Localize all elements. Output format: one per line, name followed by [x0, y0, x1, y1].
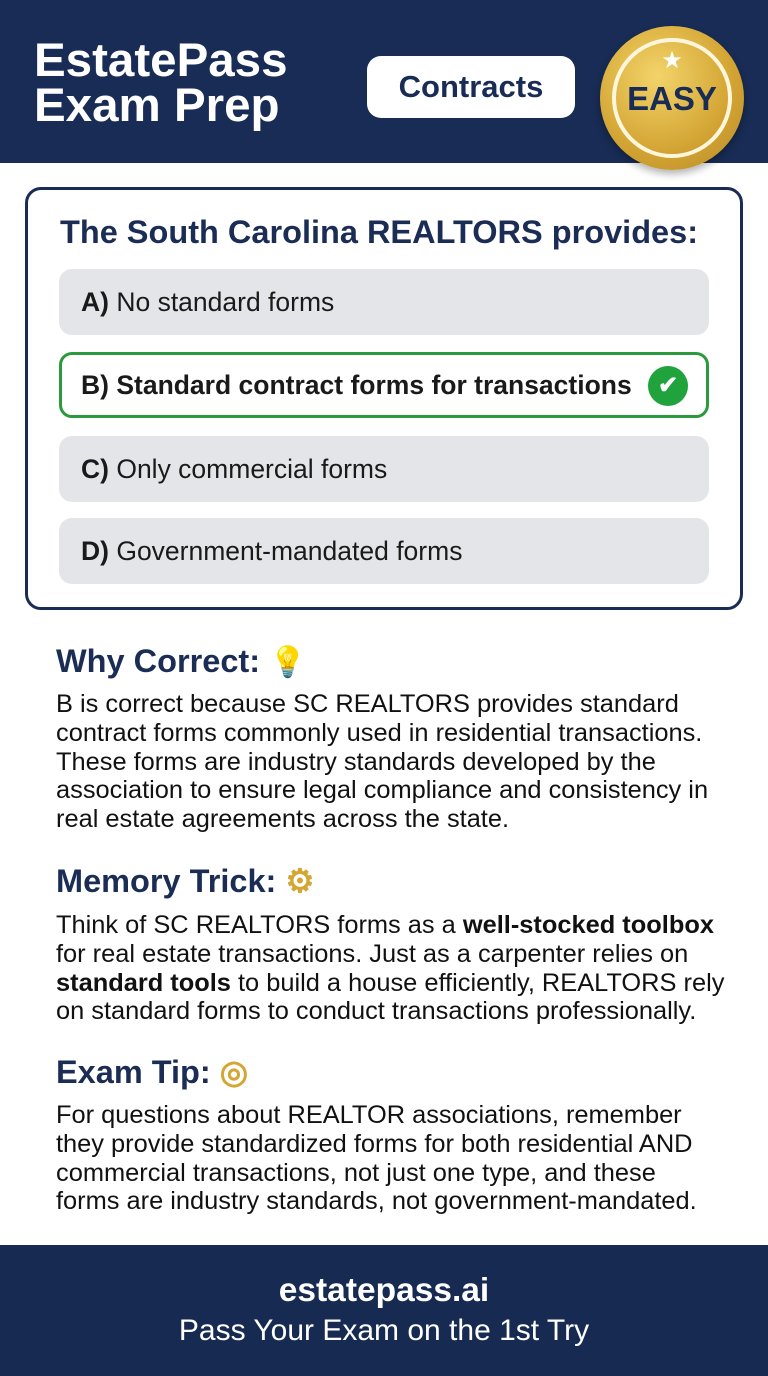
- topic pill: [367, 56, 575, 118]
- option B correct: B) Standard contract forms for transactions: [81, 370, 632, 400]
- question card: [25, 187, 743, 610]
- option D: [59, 518, 709, 584]
- heading: exam tip: Exam Tip: ◎: [56, 1054, 248, 1090]
- option A: [59, 269, 709, 335]
- option D: D) Government-mandated forms: [81, 536, 462, 566]
- text: memory trick: standard tools to build a house efficiently, REALTORS rely: [56, 969, 724, 997]
- heading: memory trick: Memory Trick: ⚙: [56, 863, 315, 899]
- text: why correct: association to ensure legal compliance and consistency in: [56, 776, 708, 804]
- question: The South Carolina REALTORS provides:: [60, 214, 698, 250]
- text: memory trick: [56, 911, 724, 1025]
- option C: [59, 436, 709, 502]
- topic pill: Contracts: [399, 69, 543, 104]
- option C: C) Only commercial forms: [81, 454, 387, 484]
- text: why correct: These forms are industry standards developed by the: [56, 748, 656, 776]
- text: exam tip: they provide standardized forms for both residential AND: [56, 1130, 693, 1158]
- difficulty badge: EASY: [627, 80, 717, 117]
- difficulty badge: [600, 26, 744, 170]
- text: why correct: real estate agreements across the state.: [56, 805, 509, 833]
- difficulty badge: ★: [661, 47, 683, 74]
- text: exam tip: For questions about REALTOR associations, remember: [56, 1101, 682, 1129]
- title: Exam Prep: [34, 79, 280, 132]
- header bar: [0, 0, 768, 163]
- text: why correct: [56, 690, 708, 833]
- icon: check: [648, 366, 688, 406]
- footer tagline: Pass Your Exam on the 1st Try: [179, 1314, 589, 1347]
- title: [34, 34, 288, 132]
- text: memory trick: Think of SC REALTORS forms as a well-stocked toolbox: [56, 911, 714, 939]
- text: exam tip: forms are industry standards, not government-mandated.: [56, 1187, 697, 1215]
- title: EstatePass: [34, 34, 288, 87]
- text: memory trick: for real estate transactions. Just as a carpenter relies on: [56, 940, 688, 968]
- option A: A) No standard forms: [81, 287, 334, 317]
- icon: check: ✔: [658, 372, 678, 399]
- option B correct: [59, 352, 709, 418]
- footer: [0, 1245, 768, 1376]
- text: why correct: contract forms commonly used in residential transactions.: [56, 719, 702, 747]
- footer site: estatepass.ai: [279, 1272, 489, 1309]
- text: exam tip: [56, 1101, 697, 1215]
- text: exam tip: commercial transactions, not just one type, and these: [56, 1159, 656, 1187]
- text: why correct: B is correct because SC REALTORS provides standard: [56, 690, 679, 718]
- heading: why correct: Why Correct: 💡: [56, 643, 306, 679]
- text: memory trick: on standard forms to conduct transactions professionally.: [56, 997, 696, 1025]
